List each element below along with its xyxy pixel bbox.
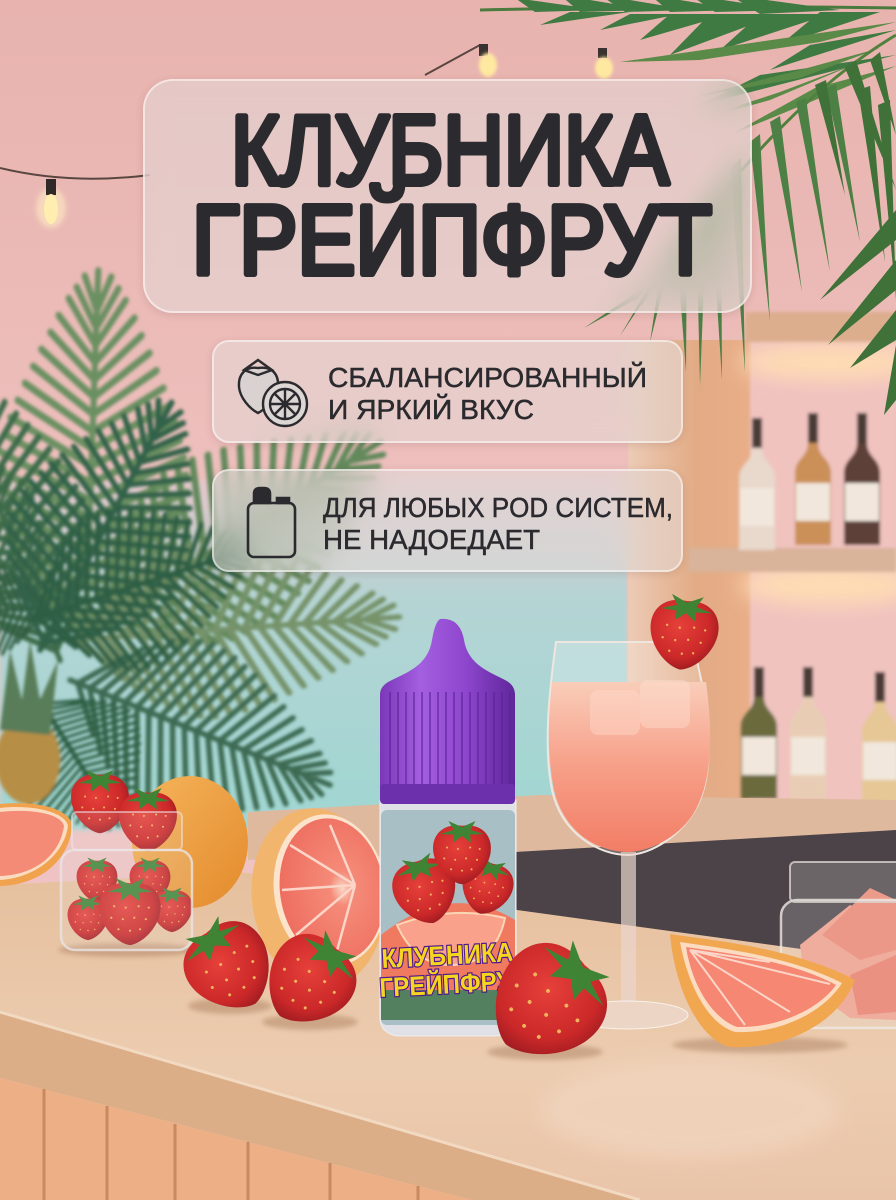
wooden pillar [628,340,752,840]
strawberries on counter [167,903,374,1044]
bottle cap [380,619,515,804]
lit shelves [688,312,896,820]
flavour text and icon: И ЯРКИЙ ВКУС [328,394,534,425]
panel: pod compatibility [212,469,683,572]
flavour text and icon [238,358,647,428]
right palm [480,0,896,415]
e-liquid bottle [379,619,519,1036]
title text: ГРЕЙПФРУТ [192,184,712,295]
counter reflections [540,1060,840,1160]
upper shelf bottles [739,413,880,550]
counter edge [0,1012,640,1200]
lower shelf bottles [741,667,896,804]
grapefruit half [240,800,396,996]
panel: balanced flavour [212,340,683,443]
jar right [781,862,896,1028]
glass jar with strawberries [61,770,192,950]
title panel [143,79,752,313]
title text: КЛУБНИКА [231,95,670,205]
grapefruit wedge [670,934,855,1047]
title text [192,95,713,295]
bottle label art: ГРЕЙПФРУ [379,965,513,1003]
grapefruit slice left [0,803,72,886]
second top frond [620,22,896,135]
pod text and icon [246,486,673,558]
wine glass with drink [548,592,722,1029]
left palm [0,267,431,865]
pineapple [0,640,60,804]
orange behind jar [132,776,248,908]
front counter surface [0,872,896,1200]
pod text and icon: ДЛЯ ЛЮБЫХ POD СИСТЕМ, [323,492,673,523]
bottle label art [379,810,519,1025]
right-edge fronds [815,52,896,415]
teal wall section [0,480,628,830]
top frond [480,7,896,10]
bottle label art: КЛУБНИКА [381,937,514,974]
back counter and cabinet [248,795,896,960]
wood panels [0,1078,472,1200]
hanging frond [640,35,896,305]
pod text and icon: НЕ НАДОЕДАЕТ [323,524,540,555]
flavour text and icon: СБАЛАНСИРОВАННЫЙ [328,362,647,393]
object shadows [58,943,848,1060]
large strawberry in front of bottle [467,920,630,1083]
string lights [0,44,613,228]
